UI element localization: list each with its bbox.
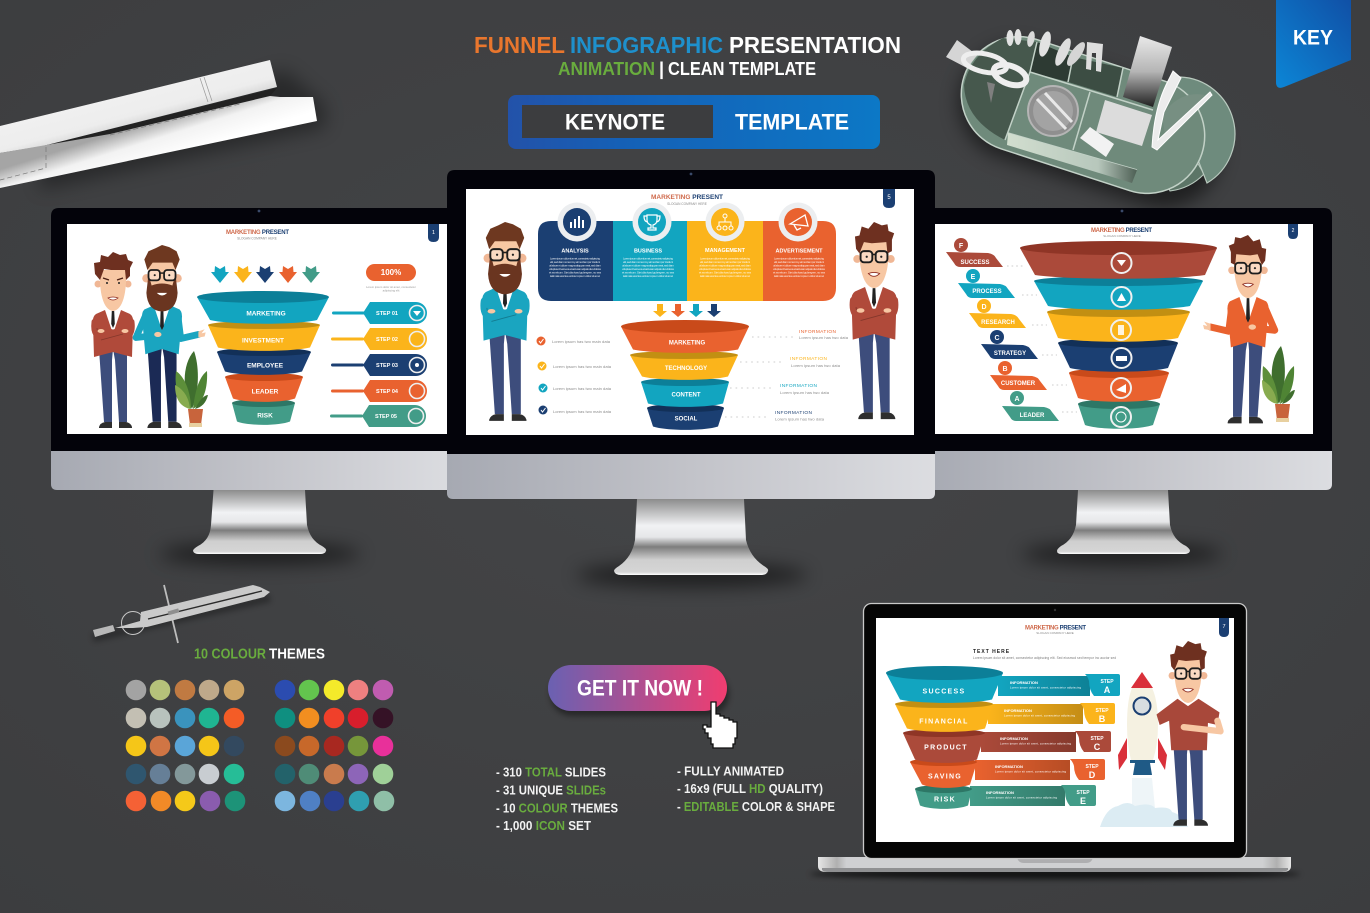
KEY corner tag xyxy=(1276,0,1351,88)
slide 7 heading xyxy=(1025,626,1086,635)
column: analysis xyxy=(538,221,613,301)
feature list: right column: - FULLY ANIMATED xyxy=(677,764,784,778)
ribbon step E: E xyxy=(1080,796,1086,806)
funnel icons xyxy=(1111,253,1132,427)
funnel chart: slide 1: RISK xyxy=(257,412,273,420)
column: advertisement xyxy=(763,221,836,301)
monitor: centre xyxy=(447,170,935,587)
ribbon step A: A xyxy=(1104,685,1111,695)
ribbon step A: Lorem ipsum dolor sit amet, consectetur adipiscing xyxy=(1010,686,1081,690)
step labels xyxy=(330,302,427,427)
person: clean shaven man in red jacket xyxy=(93,252,133,428)
label C xyxy=(981,330,1038,359)
slide 2 heading: SLOGAN COMPANY HERE xyxy=(1103,234,1141,238)
feature list: right column: - 16x9 (FULL HD QUALITY) xyxy=(677,781,823,796)
label A xyxy=(1002,391,1059,421)
get it now button: GET IT NOW ! xyxy=(577,676,703,700)
desk organizer tray xyxy=(944,22,1236,223)
person: bearded man pointing xyxy=(136,245,206,428)
keynote template banner: TEMPLATE xyxy=(735,110,849,134)
column: analysis: Lorem ipsum dolor sit amet, consectetur adipiscing xyxy=(550,256,600,260)
text block xyxy=(973,649,1116,660)
colour swatches: left block xyxy=(126,680,245,811)
slide 7 page tab: 7 xyxy=(1222,624,1226,630)
panel: four column card xyxy=(538,202,836,301)
person: bearded man arms crossed xyxy=(482,222,528,421)
funnel chart: slide 7: PRODUCT xyxy=(924,744,968,752)
funnel chart: slide 7: SAVING xyxy=(928,774,962,780)
title: CLEAN TEMPLATE xyxy=(668,59,816,79)
column: advertisement: et ea rebum. Stet clita kasd gubergren, no sea xyxy=(773,270,825,274)
ribbon step A xyxy=(998,674,1120,696)
title: INFOGRAPHIC xyxy=(570,32,723,58)
info 2: INFORMATION xyxy=(790,356,828,362)
funnel chart: slide 1 xyxy=(197,291,329,425)
monitor: right xyxy=(920,208,1332,565)
monitor: left xyxy=(51,208,460,565)
ribbon step C: C xyxy=(1094,742,1101,752)
checklist xyxy=(536,336,612,414)
label E: E xyxy=(971,274,976,281)
slide 7 page tab xyxy=(1219,618,1229,637)
label F: SUCCESS xyxy=(960,260,990,266)
slide 1 page tab: 1 xyxy=(432,230,435,236)
slide 7 heading: SLOGAN COMPANY HERE xyxy=(1036,631,1074,635)
column: business: et ea rebum. Stet clita kasd gubergren, no sea xyxy=(622,270,674,274)
slide 5 heading: SLOGAN COMPANY HERE xyxy=(667,202,707,206)
feature list: left column: - 31 UNIQUE SLIDEs xyxy=(496,782,606,798)
slide 1 page tab xyxy=(428,224,439,242)
person: man in short sleeve shirt xyxy=(1156,641,1221,826)
100% pill: 100% xyxy=(381,268,401,277)
feature list: left column xyxy=(496,764,618,833)
column: business: BUSINESS xyxy=(634,248,662,254)
step 02: STEP 02 xyxy=(376,337,398,343)
label D xyxy=(969,299,1026,328)
icon: hand cursor xyxy=(703,702,737,748)
funnel chart: slide 5 xyxy=(621,320,749,430)
slide 5 heading: MARKETING PRESENT xyxy=(651,194,723,201)
step 03: STEP 03 xyxy=(376,363,398,369)
title: FUNNEL xyxy=(474,32,565,58)
100% pill: adipiscing elit xyxy=(383,288,400,292)
title: PRESENTATION xyxy=(729,32,901,58)
text block: Lorem ipsum dolor sit amet, consectetur adipiscing elit. Sed eiusmod sed tempor inc auctor sed xyxy=(973,656,1116,660)
column: management: MANAGEMENT xyxy=(705,248,746,254)
label B: B xyxy=(1002,366,1008,373)
check item 2: Lorem ipsum has two main data xyxy=(553,364,612,369)
funnel chart: slide 5: CONTENT xyxy=(672,392,701,398)
funnel chart: slide 1: MARKETING xyxy=(246,310,286,318)
slide 2 heading xyxy=(1091,228,1152,238)
ribbon step C xyxy=(981,731,1111,752)
column: business: voluptua. At vero eos et accusam et justo duo dolores xyxy=(622,267,674,271)
label F: F xyxy=(959,243,964,250)
slide 2 page tab: 2 xyxy=(1292,228,1295,234)
column: business: elit, sed diam nonummy eirmod tempor invidunt xyxy=(623,260,673,264)
ribbon step B: STEP xyxy=(1095,708,1109,714)
ribbon step E xyxy=(970,785,1096,806)
funnel chart: slide 7: RISK xyxy=(934,796,956,804)
column: advertisement: ut labore et dolore magna aliquyam erat, sed diam xyxy=(773,264,826,268)
slide 1 heading: SLOGAN COMPANY HERE xyxy=(237,236,277,240)
colour swatches: right block xyxy=(275,680,394,811)
column: analysis: elit, sed diam nonummy eirmod tempor invidunt xyxy=(550,260,600,264)
slide 2 heading: MARKETING PRESENT xyxy=(1091,228,1152,234)
person: man in red jacket arms crossed xyxy=(851,222,897,419)
column: management: Lorem ipsum dolor sit amet, consectetur adipiscing xyxy=(700,256,750,260)
info 1: Lorem ipsum has two data xyxy=(799,335,849,340)
column: management: voluptua. At vero eos et accusam et justo duo dolores xyxy=(699,267,752,271)
funnel chart: slide 5: TECHNOLOGY xyxy=(665,366,707,372)
ribbon steps xyxy=(970,674,1120,806)
funnel chart: slide 5: SOCIAL xyxy=(675,416,698,422)
column: analysis: voluptua. At vero eos et accusam et justo duo dolores xyxy=(549,267,602,271)
column: management xyxy=(687,221,763,301)
column: analysis: takimata sanctus est lorem ipsum dolor sit amet xyxy=(550,274,600,278)
label F xyxy=(946,238,1003,267)
ribbon step B: INFORMATION xyxy=(1004,708,1032,713)
column: advertisement: ADVERTISEMENT xyxy=(775,248,823,254)
connector dots xyxy=(1007,266,1077,412)
info 2 xyxy=(740,356,841,368)
100% pill: Lorem ipsum dolor sit amet, consectetur xyxy=(366,285,416,289)
feature list: left column: - 10 COLOUR THEMES xyxy=(496,800,618,816)
slide 1 heading xyxy=(226,230,289,240)
info 3 xyxy=(730,383,830,395)
column: analysis: ut labore et dolore magna aliquyam erat, sed diam xyxy=(549,264,602,268)
label E: PROCESS xyxy=(972,289,1002,295)
step 04: STEP 04 xyxy=(376,389,399,395)
colour themes heading: THEMES xyxy=(269,646,325,662)
column: analysis: et ea rebum. Stet clita kasd gubergren, no sea xyxy=(549,270,601,274)
ribbon step A: INFORMATION xyxy=(1010,680,1038,685)
info 1: INFORMATION xyxy=(799,329,837,335)
rocket xyxy=(1100,672,1188,827)
compass drawing tool xyxy=(93,585,270,643)
step 01: STEP 01 xyxy=(376,311,398,317)
column: advertisement: elit, sed diam nonummy eirmod tempor invidunt xyxy=(774,260,824,264)
label E xyxy=(958,269,1015,298)
info 4: Lorem ipsum has two data xyxy=(775,416,825,422)
label B xyxy=(990,361,1047,390)
column: analysis: ANALYSIS xyxy=(561,248,589,254)
ribbon step B: Lorem ipsum dolor sit amet, consectetur adipiscing xyxy=(1004,714,1075,718)
column: advertisement: Lorem ipsum dolor sit amet, consectetur adipiscing xyxy=(774,256,824,260)
step 05: STEP 05 xyxy=(375,414,397,420)
ribbon step D: D xyxy=(1089,770,1096,780)
funnel chart: slide 2 xyxy=(1020,241,1217,429)
icon: trophy xyxy=(632,202,672,242)
funnel chart: slide 1: INVESTMENT xyxy=(242,338,284,344)
laptop xyxy=(810,604,1300,879)
keynote template banner: KEYNOTE xyxy=(565,110,665,134)
info 3: INFORMATION xyxy=(780,383,818,389)
ribbon step D: INFORMATION xyxy=(995,764,1023,769)
icon: bar chart xyxy=(558,202,596,242)
slide 2 page tab xyxy=(1288,224,1298,239)
column: management: ut labore et dolore magna aliquyam erat, sed diam xyxy=(699,264,752,268)
column: management: et ea rebum. Stet clita kasd gubergren, no sea xyxy=(699,270,751,274)
slide 5 heading xyxy=(651,194,723,206)
flag labels xyxy=(946,238,1059,421)
keynote template banner xyxy=(508,95,880,149)
funnel chart: slide 7 xyxy=(886,666,1003,809)
information notes xyxy=(725,329,849,422)
label C: STRATEGY xyxy=(994,351,1026,357)
icon: potted plant xyxy=(175,351,208,427)
colour themes heading: 10 COLOUR xyxy=(194,646,266,662)
label A: LEADER xyxy=(1020,413,1045,419)
slide 7 heading: MARKETING PRESENT xyxy=(1025,626,1086,632)
ribbon step B xyxy=(988,703,1115,724)
column: advertisement: takimata sanctus est lorem ipsum dolor sit amet xyxy=(774,274,824,278)
icon: megaphone xyxy=(778,202,818,242)
person: man pointing left xyxy=(1203,235,1275,423)
funnel chart: slide 7: FINANCIAL xyxy=(919,718,969,726)
ribbon step E: Lorem ipsum dolor sit amet, consectetur adipiscing xyxy=(986,796,1057,800)
label C: C xyxy=(994,335,1000,342)
arrows into funnel xyxy=(653,304,721,317)
check item 3: Lorem ipsum has two main data xyxy=(553,386,612,391)
ribbon step C: STEP xyxy=(1090,736,1104,742)
funnel chart: slide 1: LEADER xyxy=(252,388,279,396)
title xyxy=(474,32,901,79)
ribbon step C: Lorem ipsum dolor sit amet, consectetur adipiscing xyxy=(1000,742,1071,746)
KEY corner tag: KEY xyxy=(1293,26,1333,50)
text block: TEXT HERE xyxy=(973,649,1010,655)
feature list: left column: - 310 TOTAL SLIDES xyxy=(496,764,606,780)
blueprint rolls xyxy=(0,60,325,190)
title: | xyxy=(659,59,664,79)
check item 4: Lorem ipsum has two main data xyxy=(553,409,612,414)
ribbon step E: INFORMATION xyxy=(986,790,1014,795)
feature list: left column: - 1,000 ICON SET xyxy=(496,818,591,833)
title: ANIMATION xyxy=(558,59,655,79)
column: management: elit, sed diam nonummy eirmod tempor invidunt xyxy=(700,260,750,264)
colour themes heading xyxy=(194,646,325,662)
slide 5 page tab: 5 xyxy=(887,195,891,201)
info 1 xyxy=(752,329,849,340)
column: management: takimata sanctus est lorem ipsum dolor sit amet xyxy=(700,274,750,278)
ribbon step E: STEP xyxy=(1076,790,1090,796)
ribbon step D xyxy=(975,759,1105,780)
feature list: right column: - EDITABLE COLOR & SHAPE xyxy=(677,799,835,814)
funnel chart: slide 1: EMPLOYEE xyxy=(247,362,284,370)
column: business xyxy=(613,221,687,301)
column: advertisement: voluptua. At vero eos et accusam et justo duo dolores xyxy=(773,267,826,271)
ribbon step B: B xyxy=(1099,714,1106,724)
label D: D xyxy=(981,304,987,311)
label B: CUSTOMER xyxy=(1001,381,1036,387)
column: business: Lorem ipsum dolor sit amet, consectetur adipiscing xyxy=(623,256,673,260)
ribbon step C: INFORMATION xyxy=(1000,736,1028,741)
info 4: INFORMATION xyxy=(775,410,813,416)
slide 1 heading: MARKETING PRESENT xyxy=(226,230,289,236)
icon: potted plant xyxy=(1262,346,1295,422)
funnel chart: slide 7: SUCCESS xyxy=(923,688,965,696)
info 4 xyxy=(725,410,825,422)
column: business: takimata sanctus est lorem ipsum dolor sit amet xyxy=(623,274,673,278)
check item 1: Lorem ipsum has two main data xyxy=(552,339,611,344)
100% pill xyxy=(366,264,416,292)
label A: A xyxy=(1014,396,1020,403)
label D: RESEARCH xyxy=(981,320,1015,326)
info 2: Lorem ipsum has two data xyxy=(791,363,841,368)
column: business: ut labore et dolore magna aliquyam erat, sed diam xyxy=(622,264,674,268)
slide 5 page tab xyxy=(883,189,895,208)
get it now button xyxy=(548,665,729,716)
info 3: Lorem ipsum has two data xyxy=(780,390,830,395)
down arrows row xyxy=(211,266,320,283)
icon: organisation chart xyxy=(706,202,744,242)
feature list: right column xyxy=(677,764,835,814)
ribbon step A: STEP xyxy=(1100,679,1114,685)
funnel chart: slide 5: MARKETING xyxy=(669,340,705,346)
ribbon step D: Lorem ipsum dolor sit amet, consectetur adipiscing xyxy=(995,770,1066,774)
ribbon step D: STEP xyxy=(1085,764,1099,770)
